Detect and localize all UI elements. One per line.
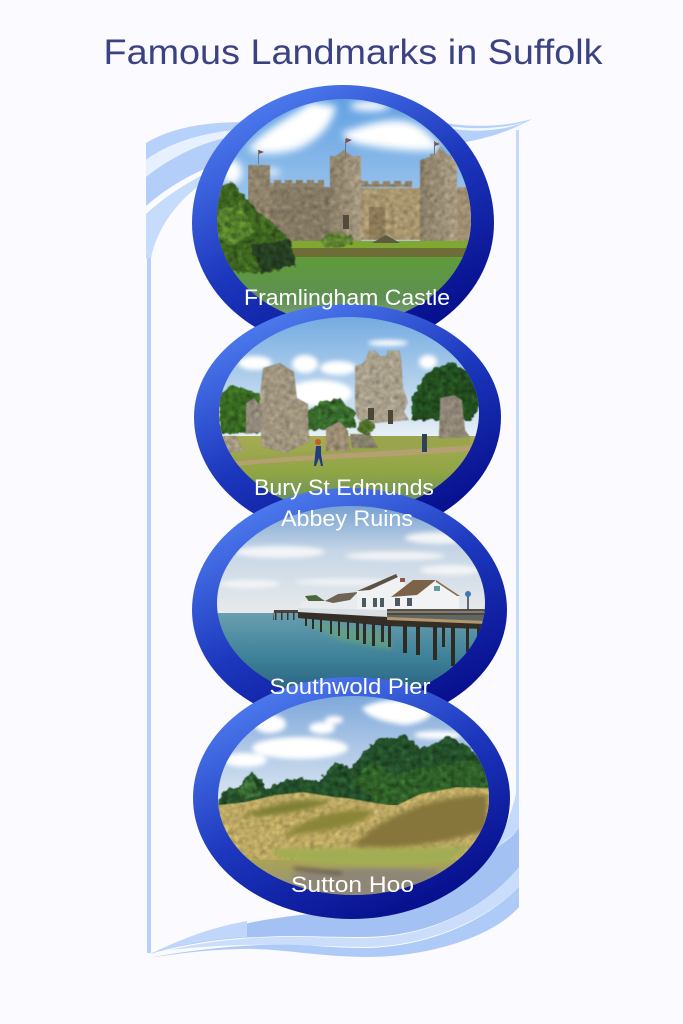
photo: pier — [217, 506, 485, 688]
caption: Southwold Pier: Southwold Pier — [270, 674, 430, 699]
photo: abbey ruins — [219, 317, 479, 500]
ribbon: main dark band — [150, 828, 519, 954]
photo: castle — [217, 99, 471, 314]
ribbon: light band — [170, 867, 519, 950]
photo: burial mounds — [214, 692, 494, 900]
ring — [192, 488, 507, 728]
mounds — [218, 787, 492, 860]
caption: Sutton Hoo: Sutton Hoo — [291, 872, 414, 897]
caption: Abbey Ruins: Abbey Ruins — [281, 506, 413, 531]
ring — [192, 85, 494, 351]
ribbon: lower band — [148, 887, 519, 958]
ribbon banner — [146, 119, 532, 958]
caption: Bury St Edmunds: Bury St Edmunds — [254, 475, 434, 500]
title: Famous Landmarks in Suffolk — [104, 33, 603, 72]
panel: Southwold Pier — [192, 488, 507, 704]
pier deck and piles — [273, 608, 486, 666]
panel: Bury St Edmunds Abbey Ruins — [194, 304, 501, 514]
ring — [194, 304, 501, 539]
ribbon: lighter left end — [150, 921, 247, 954]
buildings — [298, 574, 471, 611]
panel: Sutton Hoo — [193, 677, 510, 919]
ring — [193, 677, 510, 919]
panel: Framlingham Castle — [192, 85, 494, 351]
caption: Framlingham Castle: Framlingham Castle — [244, 285, 450, 310]
sea reflections — [302, 622, 392, 650]
